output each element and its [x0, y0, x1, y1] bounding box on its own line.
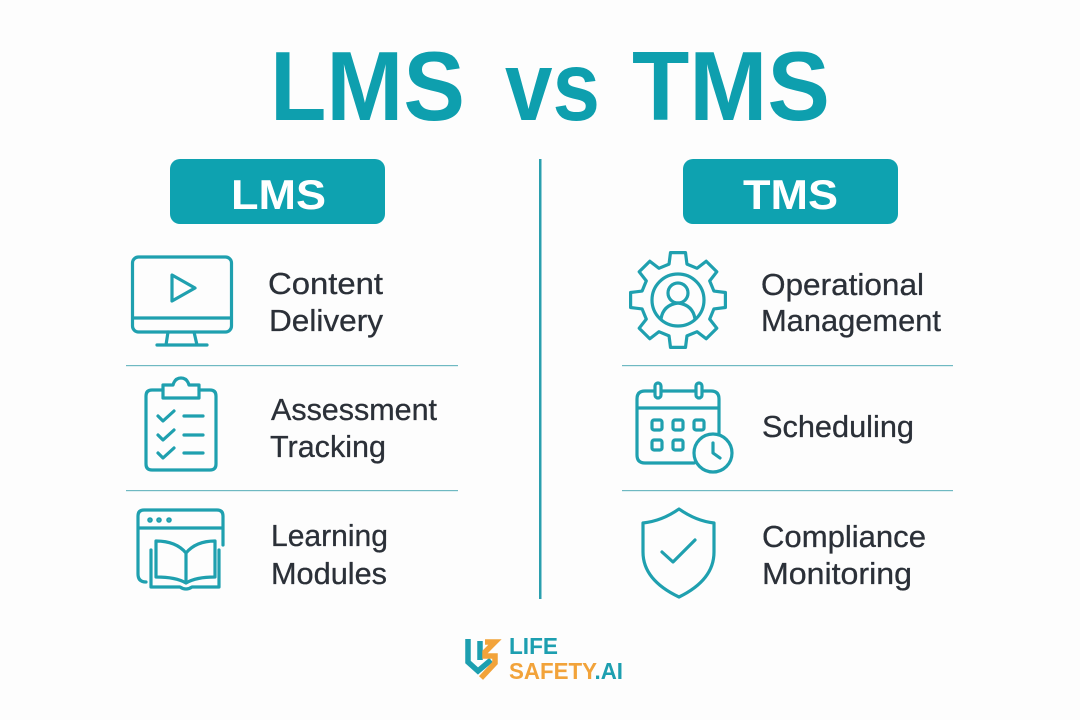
logo wordmark	[509, 633, 623, 684]
label: Compliance Monitoring: Compliance	[762, 519, 926, 554]
label: Compliance Monitoring: Monitoring	[762, 556, 912, 591]
title: TMS	[632, 31, 830, 141]
title: LMS	[270, 31, 465, 141]
heading badge: TMS	[683, 159, 898, 224]
label: Scheduling: Scheduling	[762, 409, 914, 444]
label: Assessment Tracking	[270, 392, 437, 464]
logo: Life Safety AI	[468, 633, 623, 684]
center divider	[539, 159, 542, 599]
label: Learning Modules	[271, 518, 388, 591]
label: Learning Modules: Modules	[271, 556, 387, 591]
label: Operational Management: Operational	[761, 267, 924, 302]
label: Content Delivery	[268, 266, 384, 338]
label: Content Delivery: Delivery	[269, 303, 384, 338]
heading badge: LMS	[170, 159, 385, 224]
icon: logo shield	[468, 639, 495, 678]
title	[270, 31, 830, 141]
icon: clipboard checklist	[146, 378, 216, 470]
heading badge: LMS: LMS	[231, 171, 326, 218]
icon: calendar with clock	[637, 383, 732, 472]
label: Content Delivery: Content	[268, 266, 383, 301]
panel: LMS	[126, 159, 458, 591]
panel: TMS	[622, 159, 953, 597]
heading badge: TMS: TMS	[743, 171, 838, 218]
icon: monitor with play button	[132, 257, 232, 345]
label: Compliance Monitoring	[762, 519, 926, 591]
logo wordmark: SAFETY.AI	[509, 658, 623, 684]
label: Learning Modules: Learning	[271, 518, 388, 553]
label: Assessment Tracking: Assessment	[271, 392, 437, 427]
logo wordmark: LIFE	[509, 633, 558, 659]
label: Operational Management	[761, 267, 941, 338]
icon: shield with check	[643, 509, 714, 597]
icon: gear with person	[631, 253, 725, 347]
icon: browser window with open book	[138, 510, 223, 589]
label: Assessment Tracking: Tracking	[270, 429, 386, 464]
label: Operational Management: Management	[761, 303, 941, 338]
title: vs	[505, 31, 600, 141]
